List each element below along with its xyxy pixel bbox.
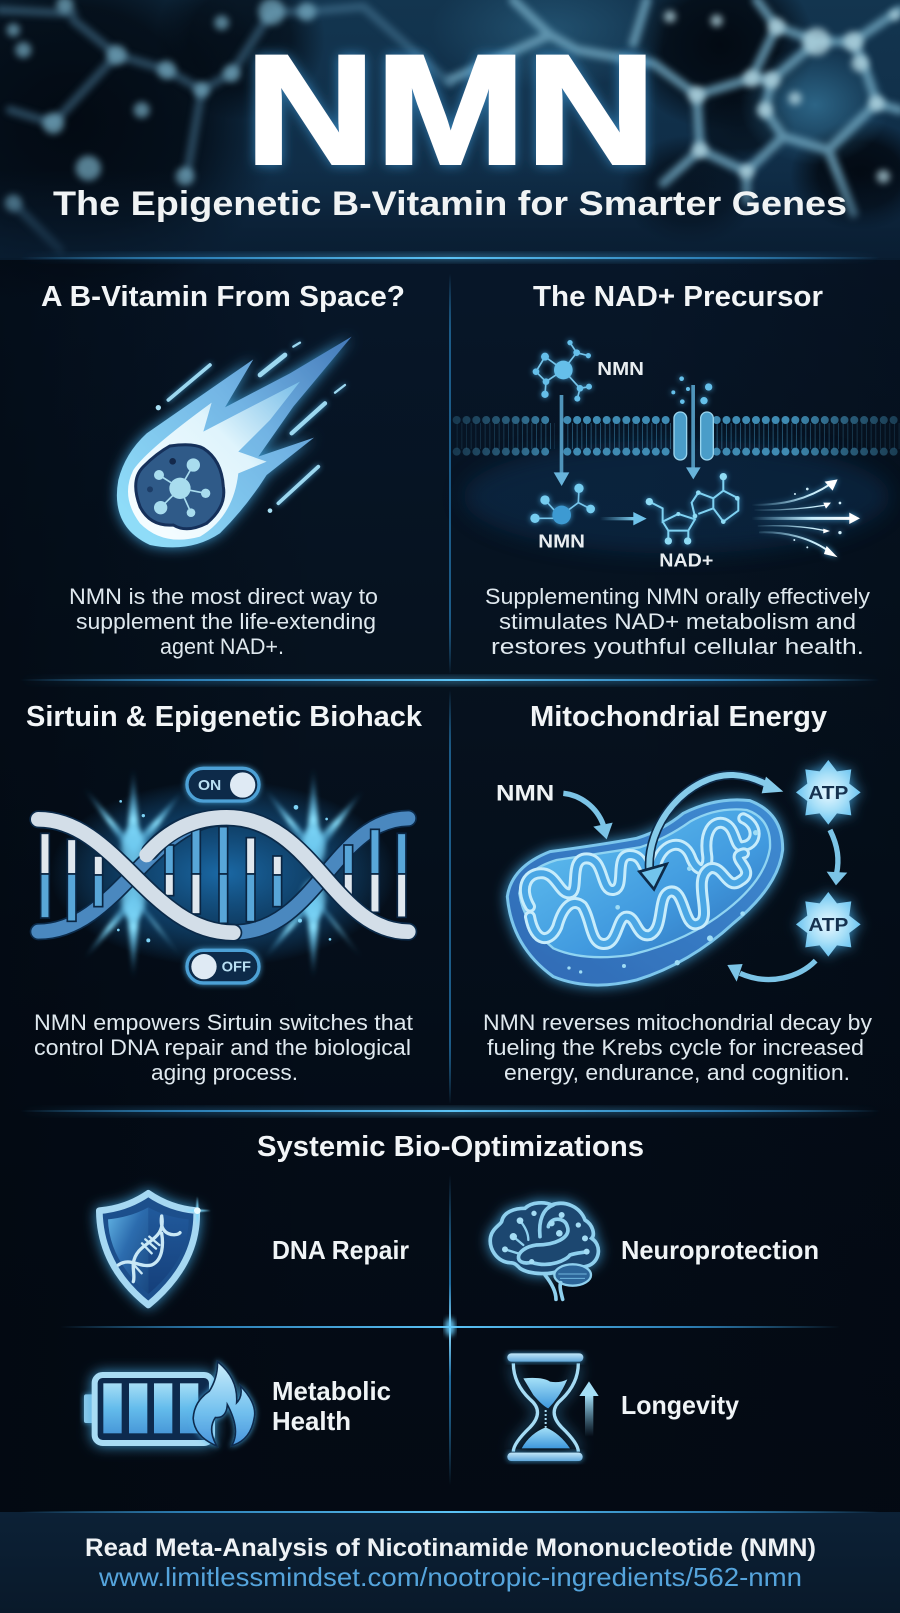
label: Health [272,1406,351,1436]
arrow: ATP to ATP [827,830,847,885]
arrow down left [554,395,569,486]
subtitle: The Epigenetic B-Vitamin for Smarter Genes [53,185,847,223]
item: longevity [507,1353,740,1461]
label: Metabolic [272,1376,391,1406]
body text: fueling the Krebs cycle for increased [487,1035,864,1060]
switch: OFF [187,950,259,983]
body text: supplement the life-extending [76,609,376,634]
label NMN top: NMN [597,358,644,379]
ATP burst bottom: ATP [808,914,848,935]
label: DNA Repair [272,1235,409,1265]
panel: sirtuin and epigenetic biohack [26,701,423,1085]
footer panel [0,1511,900,1613]
diagram: NMN crossing membrane to NAD+ [457,340,900,571]
energy arrows [752,479,860,557]
panel: mitochondrial energy [483,701,872,1085]
icon: comet with molecule core [117,337,352,547]
panel: the NAD+ precursor [457,281,900,659]
membrane channel [674,412,713,460]
body text: NMN empowers Sirtuin switches that [34,1010,413,1035]
base pairs [41,827,406,923]
heading: Sirtuin & Epigenetic Biohack [26,701,423,733]
label NAD+: NAD+ [659,550,713,571]
body text [69,584,378,659]
body text: restores youthful cellular health. [491,634,864,659]
body text: energy, endurance, and cognition. [504,1060,850,1085]
body text [485,584,870,659]
body text: Supplementing NMN orally effectively [485,584,870,609]
label NMN lower: NMN [538,530,585,551]
diagram: mitochondrion producing ATP [496,760,861,985]
label NMN: NMN [496,781,554,806]
ATP burst top: ATP [808,782,848,803]
switch: ON [187,768,259,801]
arrow: NMN in [563,793,613,839]
footer heading: Read Meta-Analysis of Nicotinamide Mononucleotide (NMN) [85,1534,816,1562]
body text: stimulates NAD+ metabolism and [499,609,856,634]
arrow: return [727,961,816,982]
item: metabolic health [84,1363,391,1444]
arrow down right [686,385,701,479]
ATP burst top [796,760,861,825]
icon: brain [490,1203,598,1299]
panel: a B-vitamin from space [41,281,405,659]
heading: A B-Vitamin From Space? [41,281,405,313]
title: NMN [245,24,656,198]
switch: ON: ON [198,778,221,794]
body text [483,1010,872,1085]
heading: systemic bio-optimizations: Systemic Bio-Optimizations [257,1131,644,1163]
molecule: NMN inside [530,484,595,524]
footer URL: www.limitlessmindset.com/nootropic-ingredients/562-nmn [98,1562,802,1592]
icon: DNA helix with on/off switches [38,767,408,983]
molecule: NAD+ [646,473,740,545]
arrow: cycle through mitochondrion [639,775,783,889]
body text: NMN reverses mitochondrial decay by [483,1010,872,1035]
item: DNA repair [99,1193,409,1305]
icon: shield with DNA [99,1193,211,1305]
icon: battery with flame [84,1363,254,1444]
label: Neuroprotection [621,1235,819,1265]
ATP burst bottom [796,892,861,957]
cell membrane [457,420,900,452]
body text: NMN is the most direct way to [69,584,378,609]
body text [34,1010,413,1085]
switch: OFF: OFF [222,960,251,976]
body text: agent NAD+. [160,634,284,659]
label [272,1376,391,1436]
header background: molecular network [0,0,900,310]
item: neuroprotection [490,1203,819,1299]
body text: aging process. [151,1060,298,1085]
label: Longevity [621,1390,740,1420]
icon: hourglass with up arrow [507,1353,599,1461]
particles through channel [671,376,712,404]
heading: Mitochondrial Energy [530,701,827,733]
heading: The NAD+ Precursor [533,281,823,313]
arrow to NAD+ [600,512,647,525]
molecule: NMN outside [533,340,592,402]
mitochondrion [507,800,783,985]
body text: control DNA repair and the biological [34,1035,411,1060]
